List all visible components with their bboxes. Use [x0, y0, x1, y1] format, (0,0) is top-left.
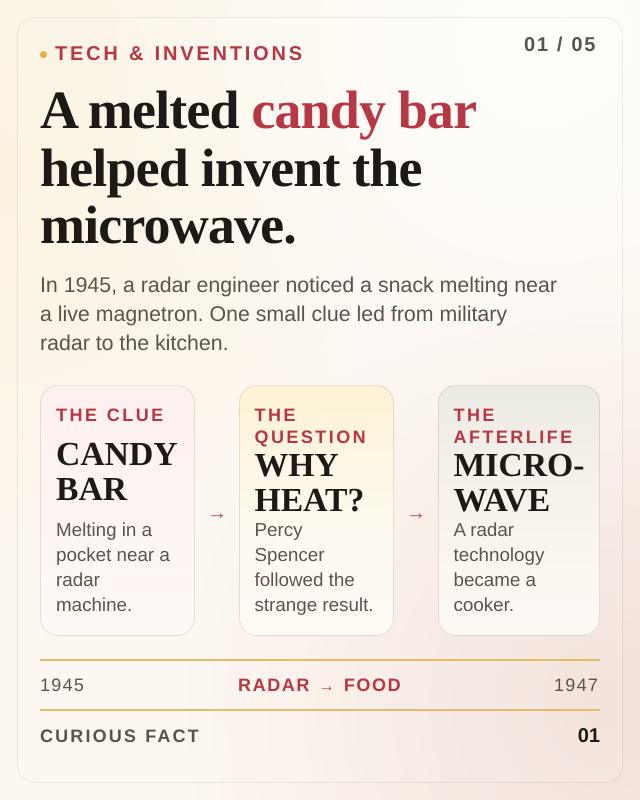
title — [40, 80, 476, 255]
heading: candy bar: CANDY — [56, 436, 178, 473]
footer label: CURIOUS FACT — [40, 726, 201, 746]
category eyebrow — [40, 43, 305, 65]
label: the afterlife — [454, 405, 575, 447]
radar to food label: RADAR → FOOD — [238, 675, 402, 695]
intro paragraph: a live magnetron. One small clue led from military — [40, 302, 507, 326]
heading: why heat: HEAT? — [254, 482, 364, 519]
end year: 1947 — [554, 675, 599, 695]
text: question: Percy — [254, 519, 303, 540]
label: the afterlife: AFTERLIFE — [454, 427, 575, 447]
footer number: 01 — [578, 725, 600, 747]
title: helped invent the — [40, 138, 422, 198]
panel: the question — [239, 385, 394, 636]
intro paragraph — [40, 273, 557, 355]
intro paragraph: In 1945, a radar engineer noticed a snack melting near — [40, 273, 557, 297]
label: the afterlife: THE — [454, 405, 497, 425]
start year: 1945 — [40, 675, 85, 695]
panel: the afterlife — [438, 385, 600, 636]
text: clue: Melting in a — [56, 519, 152, 540]
text: clue: pocket near a — [56, 544, 170, 565]
category label: TECH & INVENTIONS — [55, 43, 305, 65]
heading: microwave — [454, 447, 584, 519]
heading: why heat — [254, 447, 364, 519]
heading: microwave: WAVE — [454, 482, 550, 519]
timeline row — [40, 675, 599, 695]
text: question: followed the — [254, 569, 355, 590]
text: clue: radar — [56, 569, 100, 590]
intro paragraph: radar to the kitchen. — [40, 331, 229, 355]
heading: candy bar — [56, 436, 178, 508]
title: microwave. — [40, 195, 296, 255]
text: afterlife: became a — [454, 569, 536, 590]
text: question: Spencer — [254, 544, 324, 565]
icon: amber dot — [40, 51, 47, 58]
heading: why heat: WHY — [254, 447, 339, 484]
title: A melted candy bar — [40, 80, 476, 140]
heading: candy bar: BAR — [56, 471, 127, 508]
text: question: strange result. — [254, 594, 374, 615]
arrow 2: → — [406, 502, 426, 524]
heading: microwave: MICRO- — [454, 447, 584, 484]
label: the clue: THE CLUE — [56, 405, 166, 425]
arrow 1: → — [207, 502, 227, 524]
text: clue — [56, 519, 170, 615]
panel: the clue — [40, 385, 195, 636]
label: the question — [254, 405, 368, 447]
text: afterlife: cooker. — [454, 594, 514, 615]
page counter: 01 / 05 — [524, 34, 597, 56]
text: question — [254, 519, 374, 615]
text: clue: machine. — [56, 594, 132, 615]
text: afterlife — [454, 519, 544, 615]
label: the question: QUESTION — [254, 427, 368, 447]
label: the question: THE — [254, 405, 298, 425]
text: afterlife: A radar — [454, 519, 514, 540]
text: afterlife: technology — [454, 544, 544, 565]
